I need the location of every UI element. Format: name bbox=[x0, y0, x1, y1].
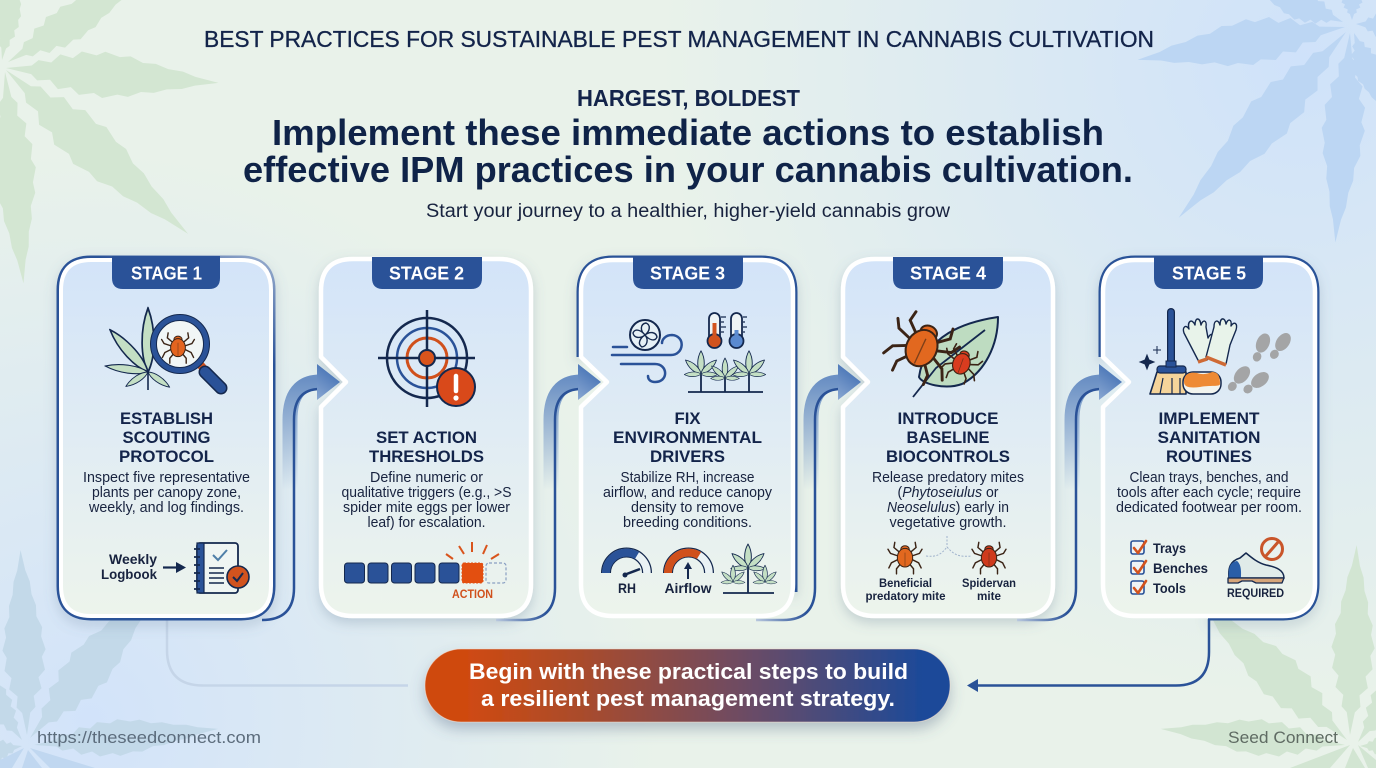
badge bbox=[372, 257, 482, 289]
main heading bbox=[243, 112, 1133, 190]
leaf: top right bbox=[1134, 0, 1376, 244]
heading bbox=[886, 409, 1010, 466]
body text: qualitative triggers (e.g., >S bbox=[342, 485, 512, 501]
mite comparison bbox=[866, 536, 1016, 603]
heading: ESTABLISH bbox=[120, 409, 213, 428]
title: BEST PRACTICES FOR SUSTAINABLE PEST MANAGEMENT IN CANNABIS CULTIVATION bbox=[204, 26, 1154, 52]
heading: BIOCONTROLS bbox=[886, 447, 1010, 466]
callout: bottom banner: a resilient pest management strategy. bbox=[481, 686, 895, 711]
airflow gauge: Airflow bbox=[664, 580, 712, 596]
icon: cannabis leaf and magnifier bbox=[105, 308, 221, 390]
leaf: bottom left bbox=[0, 549, 220, 768]
panel: stage 1 bbox=[61, 256, 271, 616]
main heading: effective IPM practices in your cannabis cultivation. bbox=[243, 149, 1133, 190]
body text: plants per canopy zone, bbox=[92, 485, 241, 501]
icon: footwear required bbox=[1227, 538, 1284, 600]
badge bbox=[893, 257, 1003, 289]
mite comparison: Beneficial bbox=[879, 578, 932, 590]
body text: vegetative growth. bbox=[890, 515, 1006, 531]
checklist: Trays bbox=[1153, 540, 1186, 556]
footer: url: https://theseedconnect.com bbox=[37, 728, 261, 747]
body text bbox=[872, 470, 1024, 531]
body text: Stabilize RH, increase bbox=[620, 470, 754, 486]
plant icon bbox=[720, 544, 778, 593]
callout: bottom banner: Begin with these practical steps to build bbox=[469, 659, 908, 684]
panel: stage 3 bbox=[581, 256, 793, 616]
heading: SCOUTING bbox=[122, 428, 210, 447]
panel: stage 2 bbox=[321, 257, 531, 616]
gauges and plant bbox=[606, 544, 778, 596]
body text: airflow, and reduce canopy bbox=[603, 485, 773, 501]
heading: SET ACTION bbox=[376, 428, 477, 447]
heading: FIX bbox=[674, 409, 701, 428]
arrow: stage 3 to stage 4 bbox=[756, 364, 861, 620]
arrow: stage 1 to stage 2 bbox=[262, 364, 340, 620]
threshold bar bbox=[344, 542, 506, 601]
body text: spider mite eggs per lower bbox=[343, 500, 510, 516]
badge: STAGE 1 bbox=[131, 264, 202, 284]
icon: footwear required: REQUIRED bbox=[1227, 586, 1284, 600]
heading: BASELINE bbox=[906, 428, 990, 447]
arrow: stage 4 to stage 5 bbox=[1017, 364, 1122, 620]
connector: stage 5 to bottom banner bbox=[967, 619, 1209, 692]
body text: (Phytoseiulus or bbox=[898, 485, 999, 501]
connector: stage 1 to bottom banner bbox=[167, 620, 408, 686]
body text: dedicated footwear per room. bbox=[1116, 500, 1302, 516]
callout: bottom banner bbox=[425, 649, 950, 722]
body text: Define numeric or bbox=[370, 470, 483, 486]
badge: STAGE 2 bbox=[389, 264, 464, 284]
body text bbox=[83, 470, 250, 516]
heading block bbox=[243, 85, 1133, 222]
badge bbox=[112, 256, 220, 289]
body text: Neoselulus) early in bbox=[887, 500, 1009, 516]
threshold bar: ACTION bbox=[452, 587, 493, 601]
heading: PROTOCOL bbox=[119, 447, 214, 466]
badge: STAGE 4 bbox=[910, 264, 986, 284]
badge: STAGE 3 bbox=[650, 264, 725, 284]
heading: SANITATION bbox=[1158, 428, 1260, 447]
leaf: bottom right bbox=[1159, 544, 1376, 768]
weekly logbook: Weekly bbox=[109, 551, 157, 567]
body text: weekly, and log findings. bbox=[88, 500, 244, 516]
RH gauge: RH bbox=[618, 580, 636, 596]
heading bbox=[369, 428, 484, 466]
icon: broom, gloves, sponge, footprints bbox=[1140, 312, 1294, 397]
checklist: Tools bbox=[1153, 580, 1186, 596]
heading bbox=[613, 409, 762, 466]
mite comparison: predatory mite bbox=[866, 591, 946, 603]
heading: ROUTINES bbox=[1166, 447, 1252, 466]
heading bbox=[1158, 409, 1260, 466]
main heading: Implement these immediate actions to establish bbox=[272, 112, 1104, 153]
body text: tools after each cycle; require bbox=[1117, 485, 1301, 501]
airflow gauge bbox=[664, 552, 712, 596]
body text: Clean trays, benches, and bbox=[1130, 470, 1288, 486]
heading: DRIVERS bbox=[650, 447, 725, 466]
heading: ENVIRONMENTAL bbox=[613, 428, 762, 447]
heading: THRESHOLDS bbox=[369, 447, 484, 466]
heading: INTRODUCE bbox=[898, 409, 998, 428]
body text bbox=[603, 470, 773, 531]
mite comparison: mite bbox=[977, 591, 1001, 603]
mite comparison: Spidervan bbox=[962, 578, 1016, 590]
subtitle: Start your journey to a healthier, higher-yield cannabis grow bbox=[426, 201, 950, 222]
leaf: top left bbox=[0, 0, 220, 285]
body text: density to remove bbox=[631, 500, 744, 516]
weekly logbook: Logbook bbox=[101, 566, 157, 582]
body text: Release predatory mites bbox=[872, 470, 1024, 486]
icon: mites on leaf bbox=[877, 306, 998, 397]
arrow: stage 2 to stage 3 bbox=[496, 364, 601, 620]
weekly logbook bbox=[101, 543, 249, 593]
body text: Inspect five representative bbox=[83, 470, 250, 486]
badge: STAGE 5 bbox=[1172, 264, 1246, 284]
badge bbox=[1154, 256, 1263, 289]
body text bbox=[342, 470, 512, 531]
RH gauge bbox=[606, 552, 647, 596]
panel: stage 4 bbox=[843, 257, 1053, 616]
body text bbox=[1116, 470, 1302, 516]
footer: brand: Seed Connect bbox=[1228, 728, 1338, 747]
heading bbox=[119, 409, 214, 466]
eyebrow: HARGEST, BOLDEST bbox=[577, 85, 800, 111]
panel: stage 5 bbox=[1103, 256, 1315, 616]
body text: leaf) for escalation. bbox=[368, 515, 486, 531]
badge bbox=[633, 256, 743, 289]
body text: breeding conditions. bbox=[623, 515, 752, 531]
checklist: Benches bbox=[1153, 560, 1208, 576]
icon: fan, airflow, thermometers, plants bbox=[612, 313, 766, 392]
icon: target with alert bbox=[378, 310, 475, 407]
heading: IMPLEMENT bbox=[1158, 409, 1260, 428]
checklist bbox=[1131, 540, 1208, 596]
